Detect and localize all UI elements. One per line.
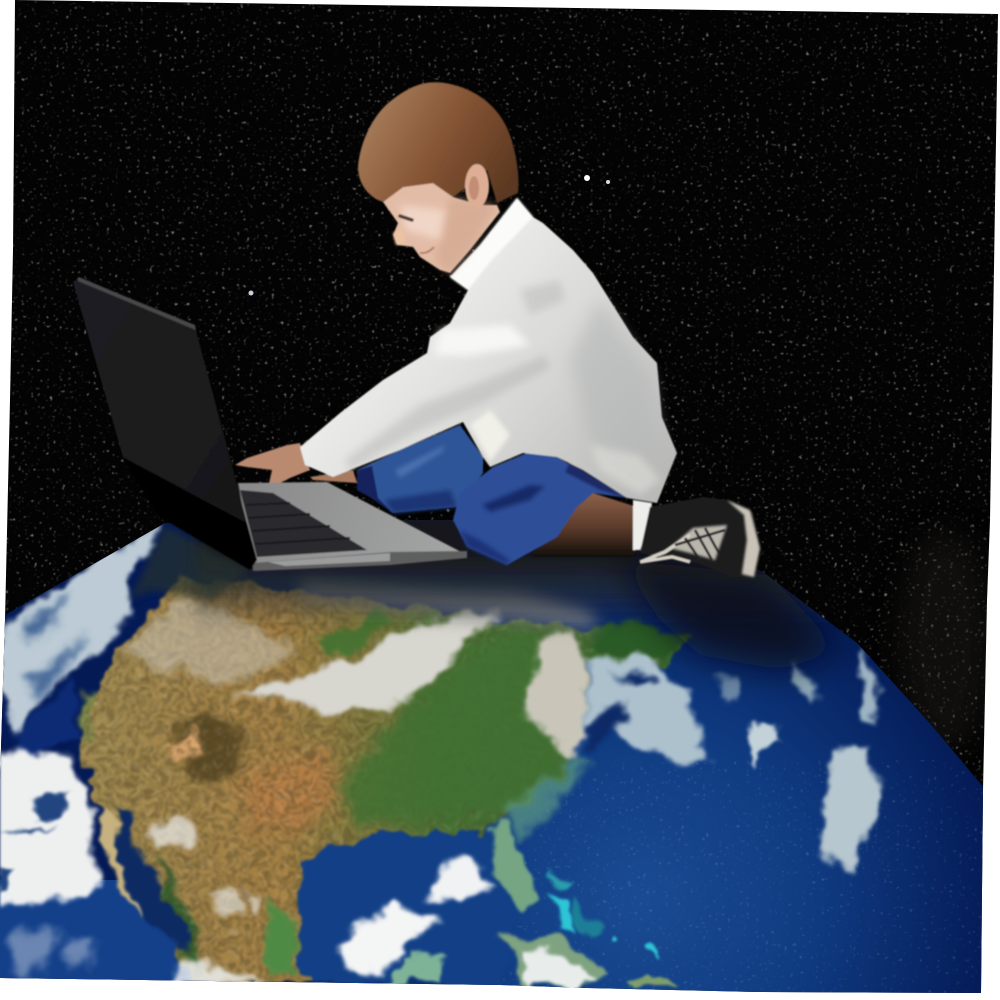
hair	[358, 82, 519, 203]
sock	[633, 500, 652, 550]
Yucatan	[390, 953, 443, 985]
Cuba	[495, 935, 612, 985]
laptop underside	[123, 457, 257, 570]
shorts: far leg	[357, 425, 483, 513]
Florida	[485, 825, 535, 910]
Gulf of California	[113, 805, 190, 955]
shadow: boy's shadow across the globe	[130, 510, 845, 670]
shorts: near leg	[453, 453, 627, 565]
hand and wrist	[235, 443, 357, 493]
Gulf of Mexico	[293, 830, 520, 985]
icon: sneaker	[640, 497, 760, 577]
leg	[530, 493, 637, 557]
ocean speckle	[500, 760, 990, 1000]
Atlantic cloud bands	[520, 630, 590, 760]
globe: Earth seen from space	[0, 500, 1000, 1000]
land: North America	[74, 574, 692, 982]
laptop base	[238, 482, 467, 563]
shirt	[300, 198, 677, 503]
clouds	[0, 518, 880, 985]
laptop lid	[73, 277, 257, 567]
eastern forest	[345, 630, 570, 825]
Baja California	[100, 805, 145, 920]
figure: boy	[73, 82, 760, 577]
ear	[465, 164, 489, 208]
Bahamas shallows	[547, 870, 655, 958]
gulf clouds	[340, 900, 437, 977]
ocean	[0, 510, 1000, 1000]
surface features: land and clouds	[0, 524, 886, 989]
keyboard	[240, 490, 367, 557]
laptop	[73, 277, 467, 571]
main cloud band	[233, 613, 500, 713]
face	[383, 183, 500, 273]
